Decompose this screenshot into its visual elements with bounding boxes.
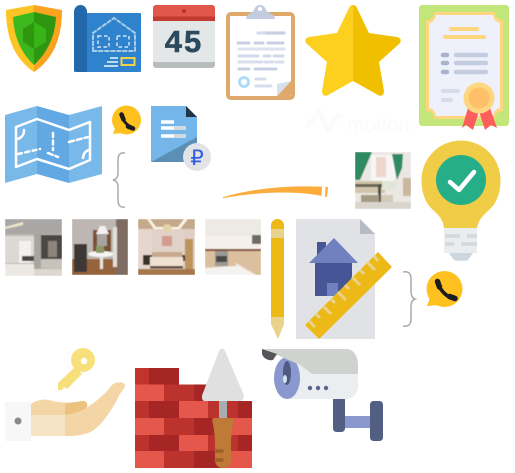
icon: blueprint: [74, 5, 141, 72]
icon: certificate: [419, 5, 509, 130]
icon: star: [305, 5, 401, 96]
icon: lightbulb with check: [422, 140, 500, 261]
icon: folded map: [5, 106, 102, 183]
icon: pencil: [271, 219, 284, 339]
icon: shield: [6, 5, 62, 72]
icon: calendar 45: 45: [165, 24, 203, 59]
icon: hand holding key: [5, 382, 125, 441]
icon: clipboard: [228, 5, 293, 98]
icon: calendar 45: [153, 5, 215, 68]
icon: phone bubble small: [112, 106, 141, 134]
icon: house plan with ruler: [296, 219, 392, 339]
photo: kitchen: [205, 219, 261, 275]
arrow: orange swoosh: [223, 186, 328, 198]
icon: document with ruble: [151, 106, 211, 171]
photo: bedroom: [138, 219, 195, 275]
icon: brick wall: [135, 368, 252, 468]
icon: key: [58, 348, 95, 390]
icon: security camera: [262, 349, 383, 441]
icon: document with ruble: ₽: [190, 146, 204, 170]
photo: room with green curtains: [355, 152, 411, 209]
photo: living room: [5, 219, 62, 276]
watermark: motion: [306, 112, 410, 137]
photo: dining room: [72, 219, 128, 275]
watermark: motion: motion: [347, 114, 410, 137]
icon: trowel: [202, 349, 244, 468]
brace: right: [403, 272, 415, 326]
icon: phone bubble large: [426, 271, 462, 307]
brace: left: [113, 153, 125, 207]
